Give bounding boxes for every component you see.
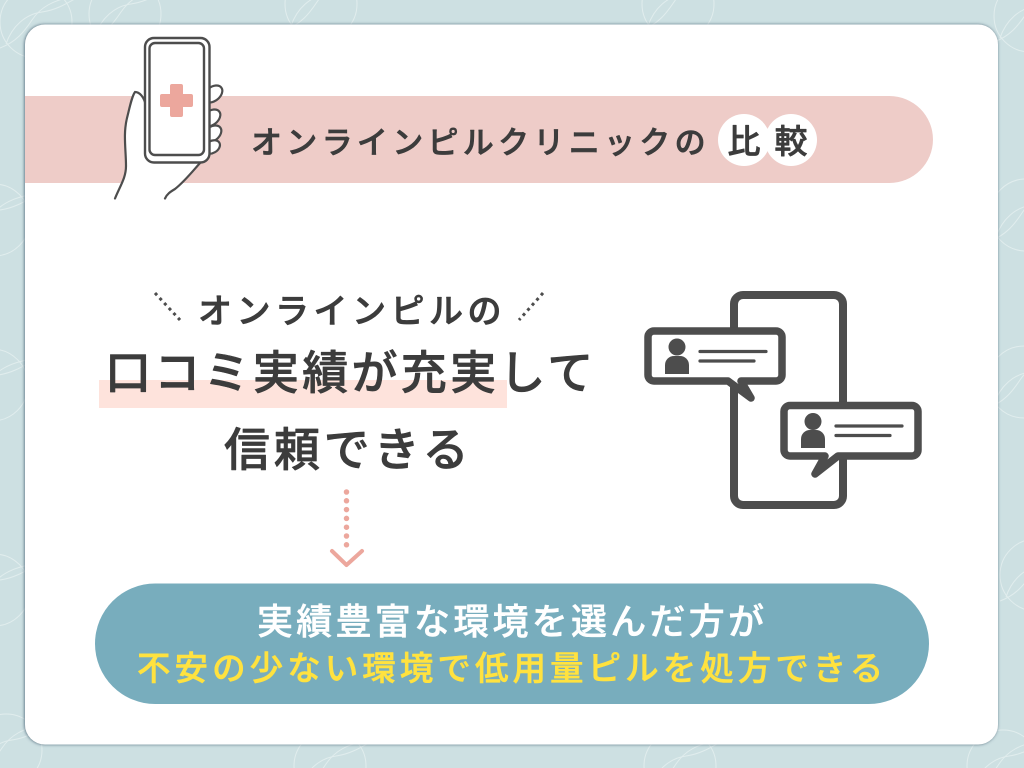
heading: header title: オンラインピルクリニックの	[251, 126, 710, 160]
callout: conclusion pill: 実績豊富な環境を選んだ方が	[257, 601, 767, 642]
text: subheading: オンラインピルの	[198, 293, 506, 331]
icon: hand holding phone with medical cross	[115, 38, 226, 198]
highlight marker	[99, 380, 507, 408]
decorative dotted ticks around subheading	[155, 293, 543, 320]
heading: header title: 較	[774, 123, 808, 160]
heading: header title: 比	[728, 123, 760, 160]
arrow: dotted down arrow	[332, 492, 362, 565]
text: main message: 信頼できる	[224, 424, 473, 476]
callout: conclusion pill: 不安の少ない環境で低用量ピルを処方できる	[137, 651, 887, 688]
callout: conclusion pill	[95, 584, 929, 704]
text: main message	[105, 347, 597, 476]
text: main message: 口コミ実績が充実して	[105, 347, 597, 399]
header band	[25, 96, 933, 183]
icon: smartphone with review speech bubbles	[648, 295, 918, 505]
heading: header title	[251, 114, 817, 166]
